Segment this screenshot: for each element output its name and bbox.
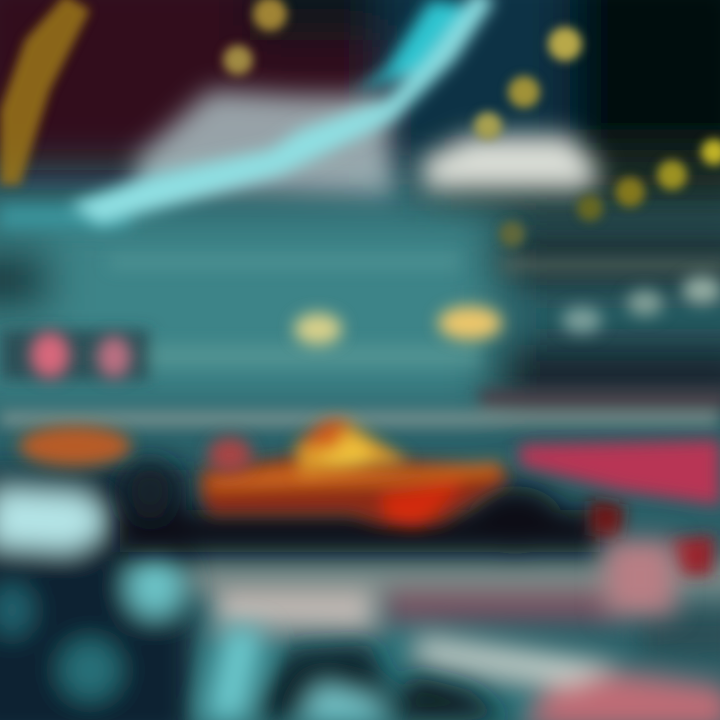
pink foreground shape	[605, 540, 675, 615]
spotlights	[30, 276, 720, 378]
gold lights	[0, 0, 720, 247]
race car	[19, 418, 720, 615]
left foreground helmet	[0, 470, 510, 720]
grandstand middle band	[0, 215, 720, 405]
left orange glow	[19, 426, 252, 473]
sky: dark upper region	[0, 0, 720, 210]
lightning bolt	[70, 0, 495, 225]
clouds	[135, 90, 600, 195]
car shadow and wheels	[120, 460, 600, 554]
grandstand rows	[0, 205, 720, 426]
car cockpit flame	[295, 418, 410, 475]
lower track base	[150, 560, 720, 720]
right crimson barrier	[520, 440, 720, 505]
car body	[200, 455, 715, 575]
